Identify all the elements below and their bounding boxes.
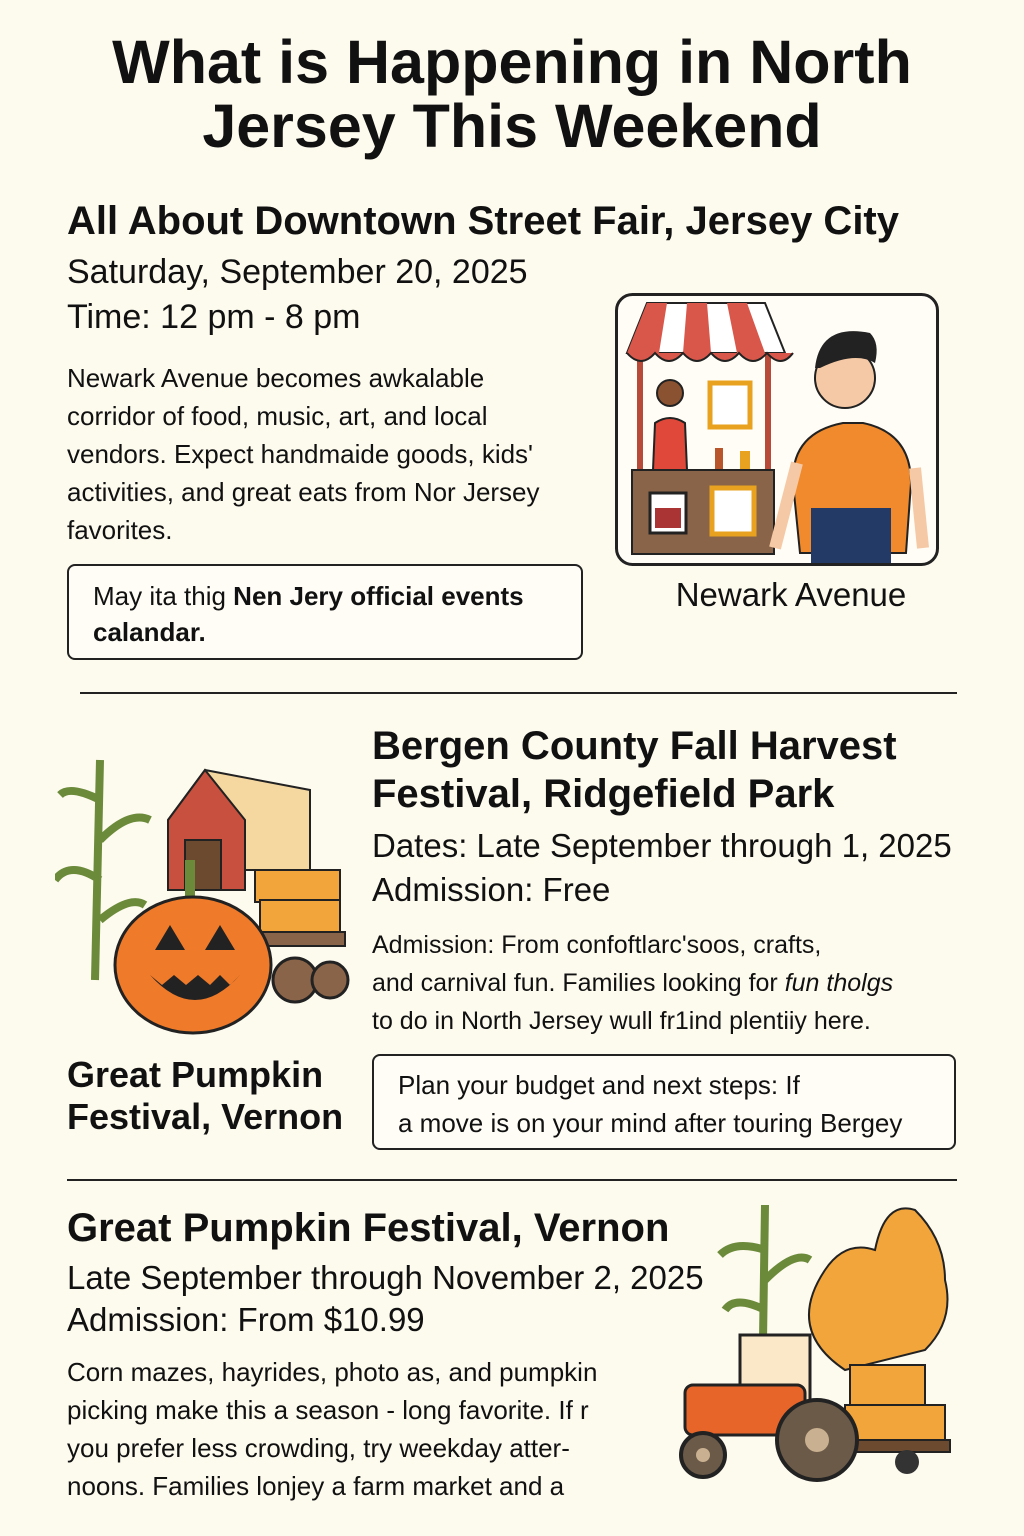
- illustration: tractor: [679, 1205, 951, 1482]
- illustration label: [67, 1054, 343, 1137]
- callout 1: calandar.: [93, 617, 206, 647]
- section 3 body: Corn mazes, hayrides, photo as, and pumpkin: [67, 1357, 597, 1387]
- title: [112, 28, 912, 160]
- section 3 body: [67, 1357, 597, 1501]
- callout 2: a move is on your mind after touring Bergey: [398, 1108, 902, 1138]
- section 2 dates: Dates: Late September through 1, 2025: [372, 827, 952, 864]
- section 3 body: noons. Families lonjey a farm market and a: [67, 1471, 564, 1501]
- callout 1: May ita thig Nen Jery official events: [93, 581, 524, 611]
- section 2 body: [372, 931, 893, 1035]
- section 2 heading: [372, 724, 897, 816]
- illustration label: Great Pumpkin: [67, 1054, 323, 1095]
- section 1 body: vendors. Expect handmaide goods, kids': [67, 439, 533, 469]
- callout 1: [67, 564, 583, 660]
- callout 2: Plan your budget and next steps: If: [398, 1070, 800, 1100]
- section 3 dates: [67, 1259, 704, 1338]
- section 1 heading: All About Downtown Street Fair, Jersey City: [67, 199, 899, 243]
- section 3 dates: Admission: From $10.99: [67, 1301, 425, 1338]
- section 1 body: corridor of food, music, art, and local: [67, 401, 488, 431]
- section 3 heading: Great Pumpkin Festival, Vernon: [67, 1206, 669, 1250]
- section 1 body: favorites.: [67, 515, 172, 545]
- title: What is Happening in North: [112, 28, 912, 96]
- section 1 body: [67, 363, 540, 545]
- section 1 date/time: Time: 12 pm - 8 pm: [67, 298, 360, 336]
- section 2 body: and carnival fun. Families looking for fun tholgs: [372, 969, 893, 997]
- section 2 body: to do in North Jersey wull fr1ind plentiiy here.: [372, 1007, 871, 1035]
- section 2 heading: Festival, Ridgefield Park: [372, 772, 834, 816]
- section 2 body: Admission: From confoftlarc'soos, crafts,: [372, 931, 821, 959]
- section 1 date/time: [67, 253, 528, 336]
- callout 2: [372, 1054, 956, 1150]
- section 1 body: Newark Avenue becomes awkalable: [67, 363, 484, 393]
- illustration: street fair stall: [615, 293, 939, 566]
- section 2 heading: Bergen County Fall Harvest: [372, 724, 897, 768]
- section 2 dates: [372, 827, 952, 908]
- illustration: harvest barn pumpkin: [55, 760, 350, 1034]
- section 1 date/time: Saturday, September 20, 2025: [67, 253, 528, 291]
- section 3 body: picking make this a season - long favorite. If r: [67, 1395, 589, 1425]
- illustration label: Festival, Vernon: [67, 1096, 343, 1137]
- section 3 dates: Late September through November 2, 2025: [67, 1259, 704, 1296]
- illustration label: Newark Avenue: [676, 576, 906, 613]
- section 3 body: you prefer less crowding, try weekday atter-: [67, 1433, 570, 1463]
- section 2 dates: Admission: Free: [372, 871, 610, 908]
- section 1 body: activities, and great eats from Nor Jersey: [67, 477, 540, 507]
- title: Jersey This Weekend: [202, 92, 822, 160]
